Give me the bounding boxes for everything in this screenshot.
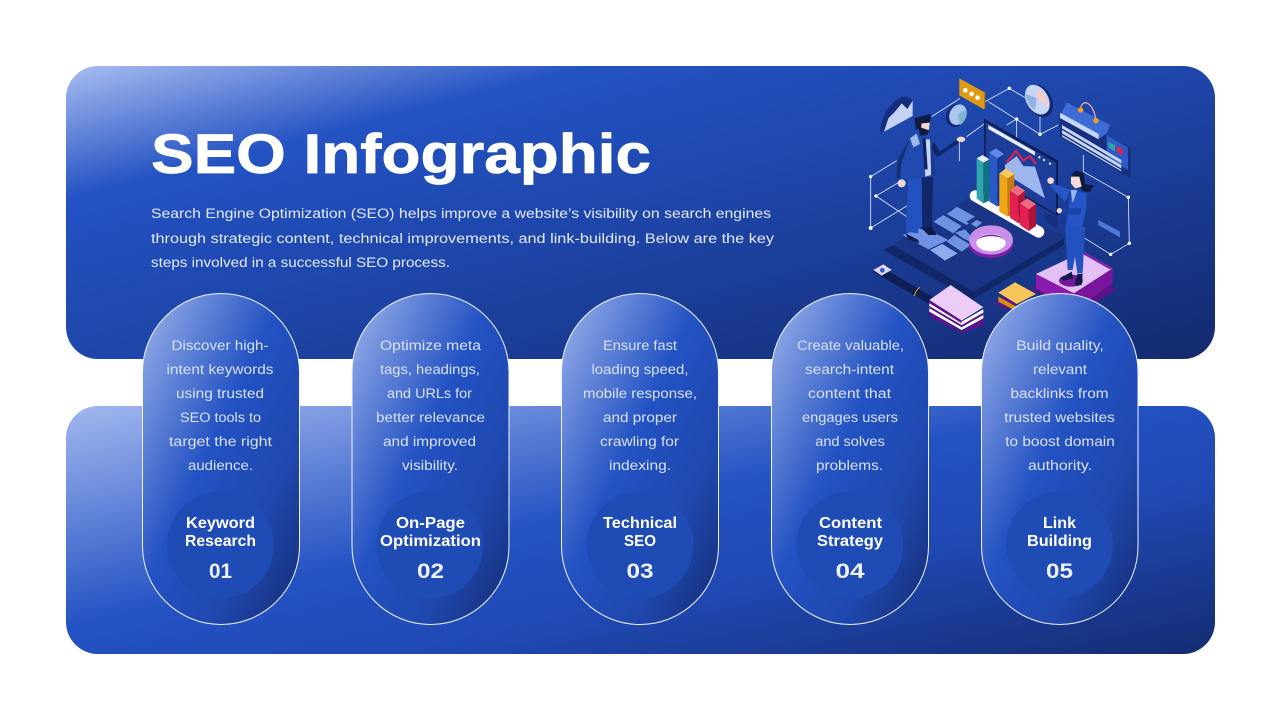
step 1 badge: Keyword [186,515,255,532]
step 2 description: Optimize meta [380,338,482,353]
intro paragraph: through strategic content, technical improvements, and link-building. Below are the key [151,231,774,246]
step 5 badge: Building [1027,533,1092,550]
step 4 description: and solves [815,434,885,449]
step 5 description: trusted websites [1004,410,1115,425]
step 3 description: crawling for [600,434,680,449]
step 2 badge [376,492,484,598]
platform [883,195,1065,300]
step 3 badge: Technical [603,515,677,532]
step 2 description: and URLs for [387,386,473,401]
step 4 badge: Content [819,515,882,532]
step 1 description: SEO tools to [180,410,261,425]
step 3 badge: 03 [626,560,654,583]
purple books [929,285,984,333]
intro paragraph: Search Engine Optimization (SEO) helps improve a website’s visibility on search engines [151,206,771,221]
wall label [1098,220,1120,237]
man figure [897,114,965,243]
icon: browser card [1059,102,1131,178]
step 5 description [1004,338,1115,473]
intro paragraph [151,206,774,270]
step 2 description: visibility. [402,458,458,473]
panel: bottom band [66,406,1215,654]
icon: magnifier [942,100,970,130]
step 1 description: Discover high- [172,338,268,353]
title: SEO Infographic [151,122,651,185]
step 4 badge: 04 [836,560,865,583]
step 1 description: audience. [188,458,253,473]
step 4 description: content that [808,386,891,401]
step 3 description [583,338,697,473]
pen and tag [873,264,935,303]
chart base [975,196,1039,232]
step 4 description: engages users [802,410,898,425]
woman figure [1047,171,1094,286]
step 1 badge: 01 [209,560,232,583]
step 4 description: problems. [816,458,883,473]
step 1 description: target the right [169,434,272,449]
step 2 badge: Optimization [380,533,481,550]
step 2 description: tags, headings, [380,362,480,377]
step 3 pill [562,294,718,624]
step 3 description: Ensure fast [603,338,677,353]
step 2 description: and improved [383,434,476,449]
step 2 badge: On-Page [396,515,465,532]
step 2 badge: 02 [417,560,444,583]
monitor [984,119,1058,228]
step 1 badge: Research [185,533,256,550]
icon: mountain chart card [880,97,913,132]
step 4 badge [796,492,904,598]
step 5 badge [1006,492,1113,598]
step 3 description: loading speed, [592,362,688,377]
step 1 description: using trusted [176,386,264,401]
step 4 description [797,338,904,473]
illustration: SEO analytics isometric scene [869,78,1131,333]
step 1 description [166,338,274,473]
pedestal [1032,252,1117,315]
bar chart [977,148,1036,231]
step 2 description [376,338,485,473]
panel: top banner [66,66,1215,359]
step 5 badge: Link [1043,515,1076,532]
step 5 badge: 05 [1046,560,1073,583]
step 5 pill [982,294,1138,624]
step 3 description: mobile response, [583,386,697,401]
intro paragraph: steps involved in a successful SEO process. [151,255,450,270]
step 5 description: Build quality, [1016,338,1104,353]
step 4 description: search-intent [805,362,894,377]
step 3 description: and proper [603,410,678,425]
step 1 badge [167,492,274,598]
step 5 description: backlinks from [1010,386,1108,401]
step 2 description: better relevance [376,410,485,425]
step 2 pill [352,294,509,624]
step 5 description: authority. [1028,458,1092,473]
step 3 description: indexing. [609,458,671,473]
step 5 description: to boost domain [1005,434,1115,449]
step 4 description: Create valuable, [797,338,904,353]
step 4 pill [772,294,928,624]
step 1 description: intent keywords [166,362,274,377]
step 3 badge [586,492,694,598]
icon: message card [959,78,985,109]
floor tiles [903,207,982,261]
ring [969,225,1013,258]
step 1 pill [142,294,300,624]
step 4 badge: Strategy [817,533,883,550]
yellow books [994,282,1037,312]
step 5 description: relevant [1033,362,1087,377]
network lines [869,87,1131,256]
icon: pie chart [1020,79,1059,122]
step 3 badge: SEO [624,533,656,550]
